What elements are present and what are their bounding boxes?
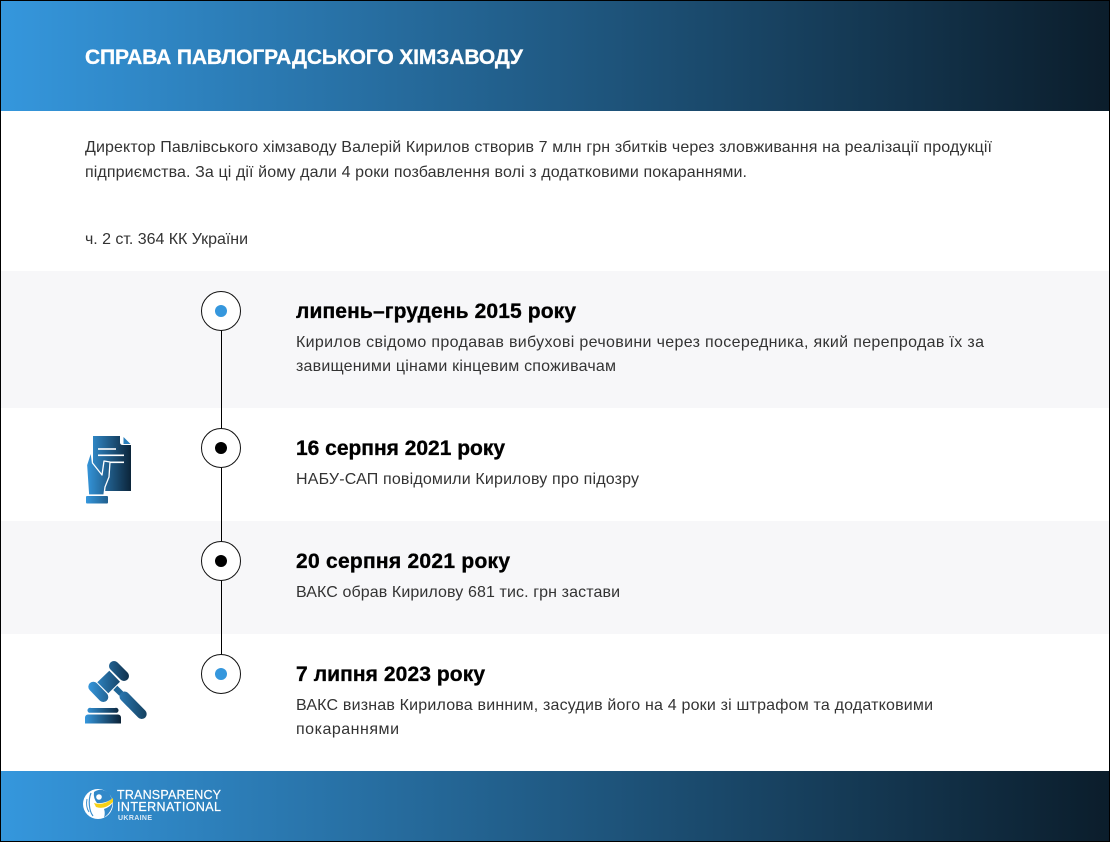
row background: 2015 [0,271,1110,408]
title: СПРАВА ПАВЛОГРАДСЬКОГО ХІМЗАВОДУ [85,46,524,69]
event: July–December 2015: Кирилов свідомо продавав вибухові речовини через посередника, який перепродав їх за [296,334,984,351]
event: 20 August 2021: 20 серпня 2021 року [296,550,510,573]
intro text [85,139,993,181]
event: 7 July 2023: 7 липня 2023 року [296,663,485,686]
timeline marker: 7 July 2023 [202,654,240,694]
logo: Transparency International Ukraine: UKRAINE [118,815,152,822]
timeline marker: 20 August 2021 [202,542,240,580]
timeline marker: 2015 [202,292,240,330]
event: 16 August 2021: НАБУ-САП повідомили Кирилову про підозру [296,471,639,488]
timeline line [220,311,222,674]
event: 20 August 2021 [296,550,620,601]
logo: Transparency International Ukraine [83,788,222,822]
intro text: підприємства. За ці дії йому дали 4 роки позбавлення волі з додатковими покараннями. [85,164,747,181]
event: 7 July 2023: покараннями [296,721,399,738]
icon: gavel [85,666,142,724]
timeline marker: 16 August 2021 [202,428,240,468]
logo: Transparency International Ukraine: TRANSPARENCY [117,788,222,802]
logo: Transparency International Ukraine: INTERNATIONAL [117,800,221,814]
header banner [0,0,1110,111]
event: July–December 2015 [296,300,984,375]
event: July–December 2015: завищеними цінами кінцевим споживачам [296,358,616,375]
intro text: Директор Павлівського хімзаводу Валерій Кирилов створив 7 млн грн збитків через зловживання на реалізації продукції [85,139,993,156]
event: 20 August 2021: ВАКС обрав Кирилову 681 тис. грн застави [296,584,620,601]
event: 16 August 2021: 16 серпня 2021 року [296,437,505,460]
event: July–December 2015: липень–грудень 2015 року [296,300,576,323]
footer banner [0,771,1110,842]
row background: 20 August 2021 [0,521,1110,634]
legal reference: ч. 2 ст. 364 КК України [85,231,248,248]
icon: hand holding document [86,436,131,504]
event: 7 July 2023 [296,663,933,738]
event: 16 August 2021 [296,437,639,488]
event: 7 July 2023: ВАКС визнав Кирилова винним, засудив його на 4 роки зі штрафом та додатковими [296,697,933,714]
logo emblem [83,789,113,819]
